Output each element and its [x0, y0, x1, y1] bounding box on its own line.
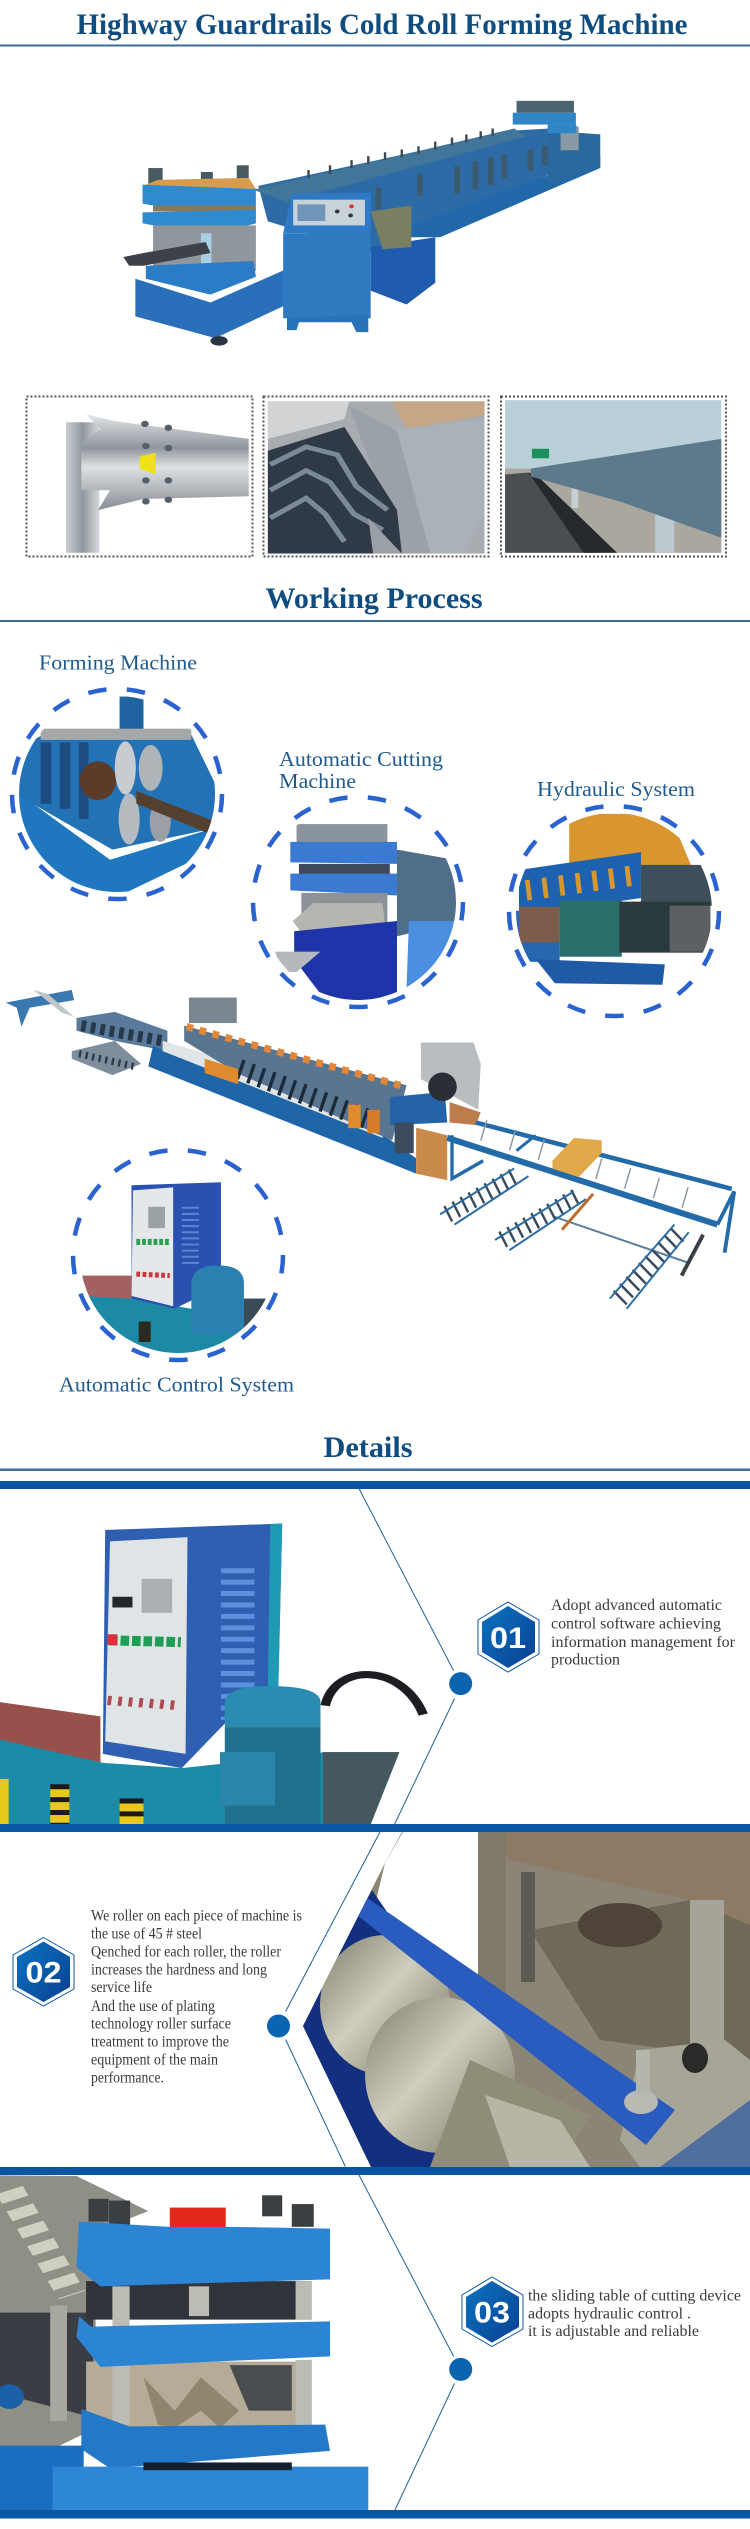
forming rolls — [0, 2175, 148, 2449]
uncoiler — [6, 990, 74, 1027]
panel 02 text: service life — [91, 1979, 152, 1996]
label: automatic control system: Automatic Control System — [59, 1372, 294, 1396]
circle: automatic cutting machine — [253, 797, 463, 1007]
panel 02 text: performance. — [91, 2070, 164, 2087]
cutting press right — [513, 101, 576, 133]
cutting press left — [123, 165, 287, 346]
full production line illustration — [6, 990, 734, 1309]
label: forming machine: Forming Machine — [39, 650, 197, 674]
badge 02 — [13, 1938, 74, 2006]
panel 02 text: increases the hardness and long — [91, 1962, 267, 1979]
forming line — [148, 1026, 416, 1174]
circle: automatic control system — [73, 1150, 283, 1365]
panel 01 band — [0, 1481, 750, 1489]
panel 02 text: equipment of the main — [91, 2052, 218, 2069]
badge 01 — [478, 1602, 539, 1672]
panel 01 text: Adopt advanced automatic — [551, 1597, 722, 1614]
main machine illustration — [123, 101, 600, 346]
title: Highway Guardrails Cold Roll Forming Machine — [76, 8, 688, 41]
panel 01 text — [551, 1597, 736, 1669]
panel 03 connector — [359, 2175, 472, 2510]
label: hydraulic system: Hydraulic System — [537, 777, 695, 801]
hydraulic box — [371, 237, 435, 304]
panel 02 photo: rollers — [300, 1832, 750, 2167]
panel 03 text: adopts hydraulic control . — [528, 2306, 691, 2323]
motor — [220, 1686, 320, 1824]
panel 01 text: production — [551, 1652, 620, 1669]
heading: details: Details — [324, 1431, 412, 1464]
label: automatic cutting machine: Automatic Cutting — [279, 747, 444, 771]
leveler — [72, 998, 237, 1075]
panel 03 photo: cutting press — [0, 2175, 368, 2510]
end control box — [421, 1042, 481, 1110]
outfeed ladders — [440, 1168, 703, 1309]
panel 03 band — [0, 2167, 750, 2175]
panel 02 text: treatment to improve the — [91, 2034, 229, 2050]
closing band — [0, 2510, 750, 2518]
label: automatic cutting machine — [279, 747, 444, 793]
panel 02 text: And the use of plating — [91, 1998, 215, 2015]
hazard stripes — [0, 1779, 143, 1824]
cable — [325, 1675, 423, 1715]
circle: forming machine — [12, 689, 222, 899]
moving cutter — [552, 1138, 602, 1177]
panel 02 text: technology roller surface — [91, 2016, 231, 2033]
panel 02 text: We roller on each piece of machine is — [91, 1908, 302, 1925]
panel 01 connector — [359, 1489, 472, 1824]
panel 03 text: the sliding table of cutting device — [528, 2287, 741, 2304]
panel 03 text: it is adjustable and reliable — [528, 2323, 699, 2340]
badge 02: 02 — [26, 1956, 62, 1990]
product photo: roadside guardrail — [501, 396, 726, 556]
end press — [390, 1073, 481, 1180]
circle: hydraulic system — [509, 806, 719, 1016]
control cabinet — [283, 193, 371, 332]
output table — [447, 1123, 734, 1263]
product photo: guardrail post — [26, 396, 252, 556]
panel 02 text — [91, 1908, 302, 2087]
badge 03: 03 — [474, 2296, 510, 2330]
label: automatic cutting machine: Machine — [279, 769, 356, 793]
panel 02 connector — [267, 1832, 380, 2167]
badge 01: 01 — [490, 1622, 526, 1655]
cabinet — [103, 1524, 282, 1768]
panel 02 band — [0, 1824, 750, 1832]
heading: working process: Working Process — [266, 582, 482, 615]
panel 03 text — [528, 2287, 741, 2340]
panel 02 text: Qenched for each roller, the roller — [91, 1943, 282, 1960]
panel 02 text: the use of 45 # steel — [91, 1926, 202, 1943]
panel 01 photo: control cabinet — [0, 1524, 423, 1824]
badge 03 — [462, 2277, 523, 2347]
panel 01 text: information management for — [551, 1634, 736, 1651]
product photo: stacked guardrails — [264, 396, 488, 556]
panel 01 text: control software achieving — [551, 1616, 721, 1632]
